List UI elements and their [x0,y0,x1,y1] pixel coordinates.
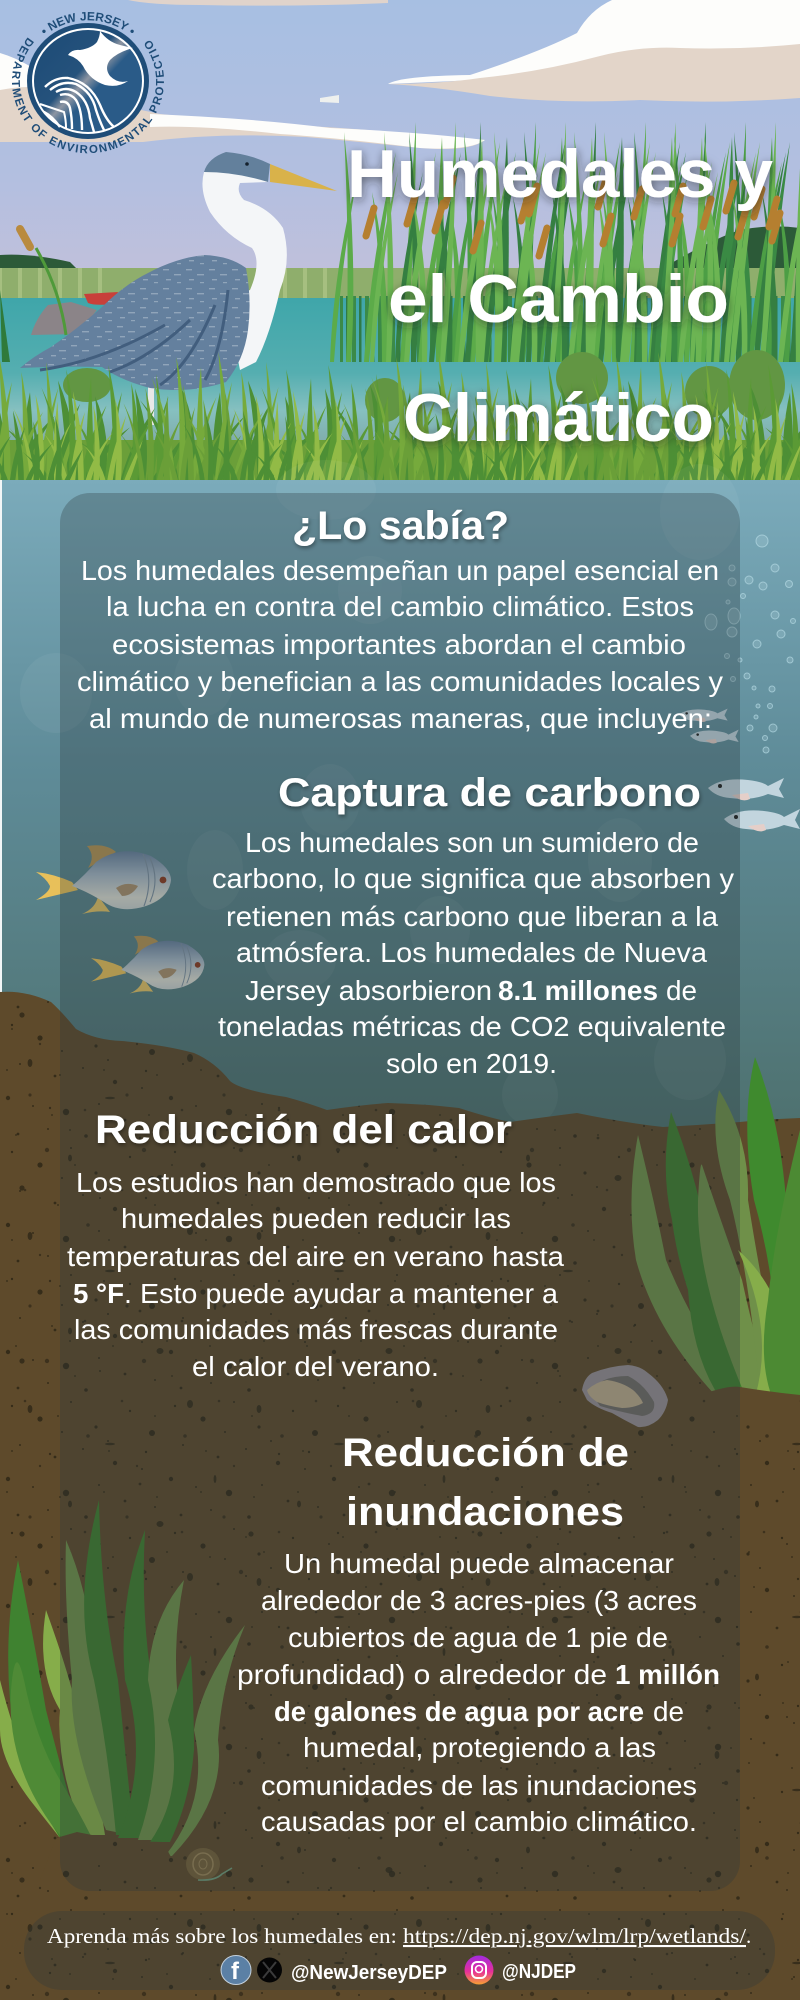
text block: flood reduction: de [653,1696,684,1727]
soil [0,980,800,2000]
sky [0,0,800,300]
underwater section background [0,460,800,1140]
clouds [0,0,800,149]
heading: Lo sabía: ¿Lo sabía? [292,504,509,548]
text block: heat reduction: temperaturas del aire en verano hasta [67,1241,564,1272]
title: Climático [403,380,714,456]
footer link text: . [746,1924,751,1948]
text block: carbon capture: atmósfera. Los humedales de Nueva [236,937,707,968]
panel: main translucent card [60,493,740,1891]
text block: heat reduction: las comunidades más frescas durante [74,1314,558,1345]
footer pill [24,1911,775,1990]
text block: intro: ecosistemas importantes abordan el cambio [112,629,686,660]
seagrass left [0,1500,245,1880]
logo: New Jersey DEP seal: • NEW JERSEY • [42,12,134,33]
text block: intro: al mundo de numerosas maneras, que incluyen: [89,703,712,734]
text block: heat reduction [67,1167,564,1382]
oyster [582,1365,668,1427]
footer link text [47,1924,751,1948]
hero scene: wetland landscape [0,0,800,482]
text block: flood reduction [237,1548,720,1837]
text block: heat reduction: 5 °F [73,1278,124,1309]
cattail heads [366,178,780,256]
text block: carbon capture: de [666,975,697,1006]
foreground grass [0,352,800,482]
text block: carbon capture: Los humedales son un sumidero de [245,827,699,858]
marsh shrubs [63,350,785,422]
text block: carbon capture [212,827,734,1079]
fish: large pompano 1 [36,845,171,914]
fish: small minnows [679,709,800,831]
text block: heat reduction: Los estudios han demostrado que los [76,1167,556,1198]
text block: intro: climático y benefician a las comunidades locales y [77,666,723,697]
text block: heat reduction: humedales pueden reducir las [121,1203,511,1234]
text block: flood reduction: alrededor de 3 acres-pies (3 acres [261,1585,697,1616]
text block: heat reduction: el calor del verano. [192,1351,439,1382]
text block: intro [77,555,723,734]
bubbles [705,535,796,753]
seagrass right [631,1057,800,1420]
icon: X [257,1958,282,1982]
snail [186,1848,232,1880]
fish: large pompano 2 [91,936,204,993]
text block: carbon capture: solo en 2019. [386,1048,557,1079]
distant shoreline [0,226,800,300]
text block: flood reduction: humedal, protegiendo a las [303,1732,656,1763]
title [347,136,773,456]
text block: carbon capture: 8.1 millones [498,975,658,1006]
text block: flood reduction: causadas por el cambio climático. [261,1806,697,1837]
icon: instagram [464,1956,494,1984]
text block: carbon capture: carbono, lo que significa que absorben y [212,863,734,894]
icon: facebook: f [231,1958,240,1985]
title: Humedales y [347,136,773,212]
text block: carbon capture: toneladas métricas de CO2 equivalente [218,1011,726,1042]
text block: flood reduction: de galones de agua por acre [274,1696,644,1727]
rock [31,302,97,335]
lake [0,298,800,448]
text block: carbon capture: Jersey absorbieron [245,975,492,1006]
heading: Captura de carbono: Captura de carbono [278,771,701,815]
left cattail [0,229,66,362]
boat [84,292,118,305]
text block: flood reduction: Un humedal puede almacenar [284,1548,674,1579]
text block: flood reduction: comunidades de las inundaciones [261,1770,697,1801]
text block: heat reduction: . Esto puede ayudar a mantener a [124,1278,558,1309]
text block: carbon capture: retienen más carbono que liberan a la [226,901,718,932]
icon: facebook [221,1956,251,1985]
social handle: instagram: @NJDEP [502,1961,576,1983]
text block: flood reduction: 1 millón [615,1659,720,1690]
text block: flood reduction: cubiertos de agua de 1 pie de [288,1622,668,1653]
text block: flood reduction: profundidad) o alrededor de [237,1659,607,1690]
text block: intro: Los humedales desempeñan un papel esencial en [81,555,719,586]
social handle: facebook and X: @NewJerseyDEP [291,1962,447,1984]
footer link text: Aprenda más sobre los humedales en: [47,1924,397,1948]
title: el Cambio [388,261,729,337]
heading: Reducción de inundaciones: Reducción de [342,1431,629,1475]
heading: Reducción del calor: Reducción del calor [95,1108,512,1152]
heading: Reducción de inundaciones: inundaciones [346,1490,624,1534]
footer link text: https://dep.nj.gov/wlm/lrp/wetlands/ [403,1924,746,1948]
heron [20,152,337,425]
heading: Reducción de inundaciones [342,1431,629,1534]
right reeds [330,122,800,362]
text block: intro: la lucha en contra del cambio climático. Estos [106,591,694,622]
